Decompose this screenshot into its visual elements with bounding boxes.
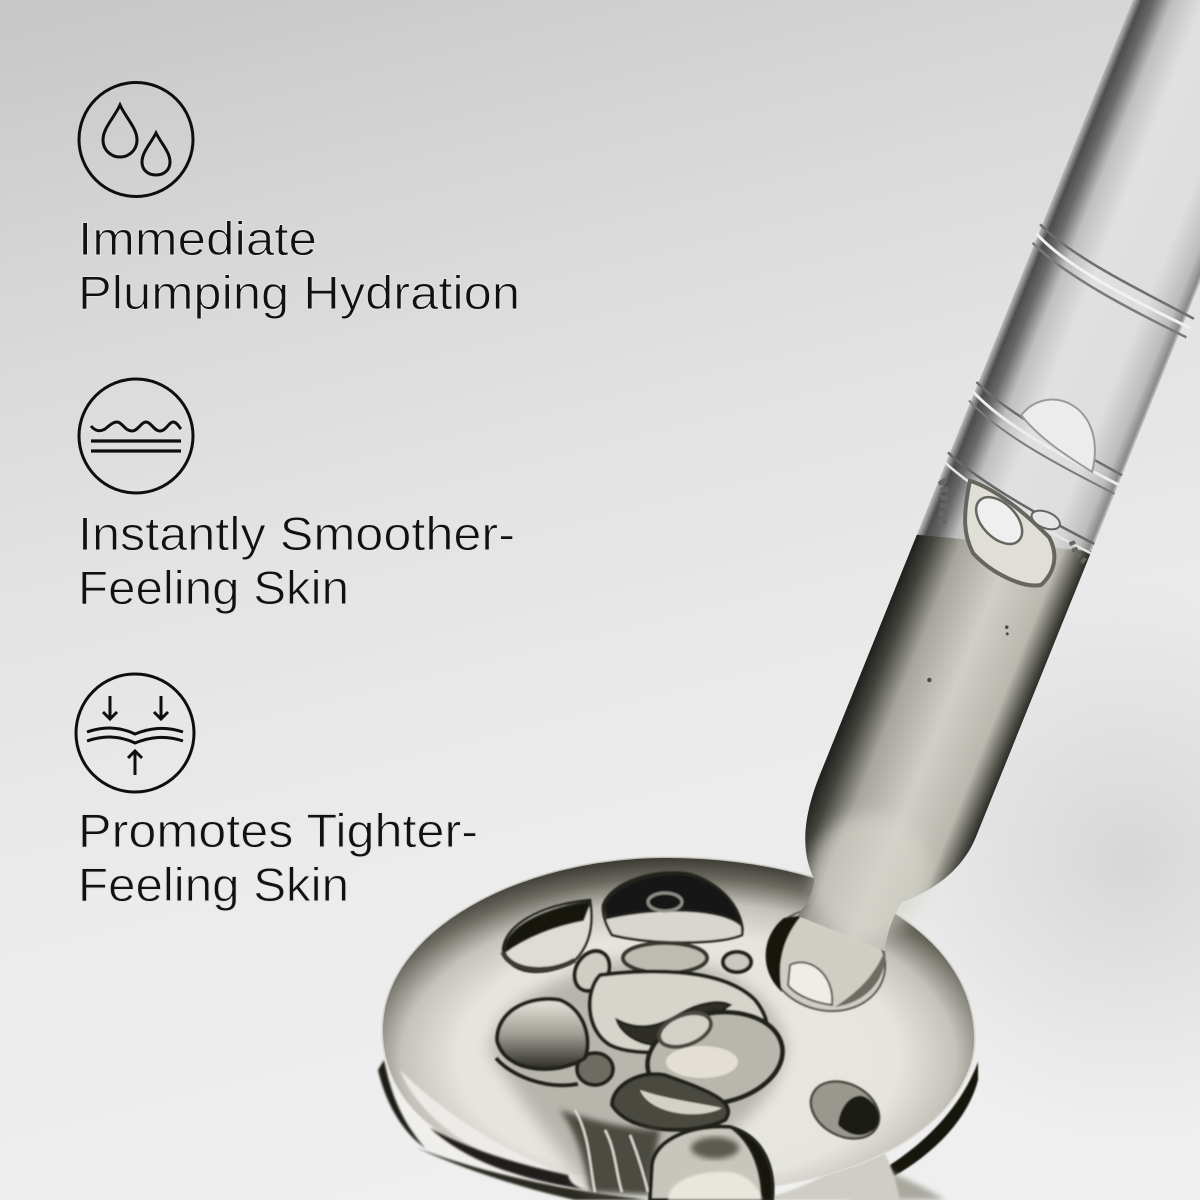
specks in liquid [926,605,1012,703]
benefit 1 [78,82,520,319]
serum puddle reflection and rim [378,1060,978,1200]
glass dropper tube [766,0,1200,970]
heading: immediate plumping hydration: Plumping Hydration [78,266,520,319]
bubbles [490,872,889,1200]
bubble: upper middle [603,872,742,942]
heading: promotes tighter-feeling skin [78,804,478,911]
bubble: lower middle [612,1074,728,1130]
neck highlight [793,796,947,954]
liquid-filled section with tapered neck [768,488,1091,967]
heading: immediate plumping hydration [78,212,520,319]
bubble: central large [590,971,767,1060]
icon: smooth skin layers [79,379,193,493]
soft dark mass under bubbles [490,959,785,1192]
bubble: lower right large [640,1002,790,1114]
heading: promotes tighter-feeling skin: Feeling Skin [78,858,349,911]
small bubbles [568,945,751,1085]
air bubble in tube [1012,388,1113,472]
serum puddle [382,857,975,1192]
heading: immediate plumping hydration: Immediate [78,212,317,265]
glass rings [933,224,1200,556]
streaks under bubbles [575,1110,648,1192]
icon: tightening arrows [76,674,194,792]
heading: promotes tighter-feeling skin: Promotes Tighter- [78,804,478,857]
benefit 2 [78,379,515,614]
heading: instantly smoother-feeling skin [78,507,515,614]
bubble: upper left [503,900,591,972]
empty tube section [910,0,1200,614]
bulb of dropper tip in serum [753,894,899,1026]
bubble: left [496,999,588,1085]
bubble: bottom [650,1127,773,1200]
benefit 3 [76,674,478,911]
icon: water drops [79,82,193,196]
dark reflection under bubbles [560,1110,660,1195]
heading: instantly smoother-feeling skin: Feeling Skin [78,561,349,614]
heading: instantly smoother-feeling skin: Instantly Smoother- [78,507,515,560]
trapped bubbles at liquid level [916,470,1097,603]
bubble: ring under upper middle [623,943,707,973]
dark droplet right [801,1070,889,1150]
